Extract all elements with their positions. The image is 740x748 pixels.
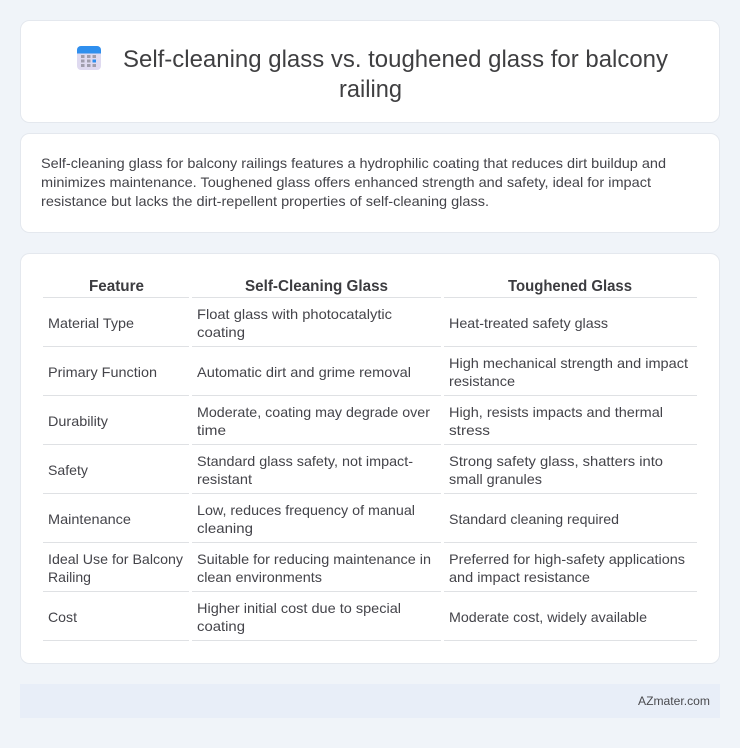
table row: durability: Durability: [48, 413, 108, 429]
table row: cost: [43, 600, 697, 641]
table row: durability: stress: [449, 422, 490, 438]
table header: Toughened Glass: [508, 278, 632, 295]
table row: maintenance: Standard cleaning required: [449, 511, 619, 527]
table row: cost: Moderate cost, widely available: [449, 609, 647, 625]
text block: introduction: [41, 155, 666, 209]
table row: maintenance: Maintenance: [48, 511, 131, 527]
panel: comparison table: [20, 254, 720, 664]
table row: primary function: Primary Function: [48, 364, 157, 380]
table row: ideal use: Railing: [48, 569, 91, 585]
table row: primary function: [43, 355, 697, 396]
table row: primary function: High mechanical strength and impact: [449, 355, 688, 371]
table header: [43, 278, 697, 298]
icon: calendar: [77, 46, 101, 70]
table row: ideal use: [43, 551, 697, 592]
table row: primary function: resistance: [449, 373, 515, 389]
table row: cost: Cost: [48, 609, 77, 625]
table row: material type: Float glass with photocatalytic: [197, 306, 392, 322]
text block: introduction: Self-cleaning glass for balcony railings features a hydrophilic coating that reduces dirt buildup and: [41, 155, 666, 171]
table row: maintenance: cleaning: [197, 520, 253, 536]
table row: safety: Strong safety glass, shatters into: [449, 453, 663, 469]
footer: AZmater.com: [638, 694, 710, 708]
table row: ideal use: clean environments: [197, 569, 322, 585]
footer: [20, 684, 720, 718]
panel: title card: [20, 20, 720, 122]
table row: safety: [43, 453, 697, 494]
table row: cost: coating: [197, 618, 245, 634]
table row: safety: small granules: [449, 471, 542, 487]
table row: safety: resistant: [197, 471, 252, 487]
table row: ideal use: Suitable for reducing maintenance in: [197, 551, 431, 567]
table row: durability: High, resists impacts and thermal: [449, 404, 663, 420]
table row: ideal use: Ideal Use for Balcony: [48, 551, 183, 567]
title: Self-cleaning glass vs. toughened glass for balcony: [123, 46, 668, 73]
table row: maintenance: Low, reduces frequency of manual: [197, 502, 415, 518]
table row: durability: time: [197, 422, 226, 438]
table row: material type: Heat-treated safety glass: [449, 315, 608, 331]
text block: introduction: resistance but lacks the dirt-repellent properties of self-cleaning glass.: [41, 193, 489, 209]
title: railing: [339, 76, 402, 103]
title: [123, 46, 668, 103]
table row: material type: Material Type: [48, 315, 134, 331]
table row: ideal use: Preferred for high-safety applications: [449, 551, 685, 567]
table row: cost: Higher initial cost due to special: [197, 600, 401, 616]
table row: durability: [43, 404, 697, 445]
table row: material type: coating: [197, 324, 245, 340]
table row: primary function: Automatic dirt and grime removal: [197, 364, 411, 380]
table row: ideal use: and impact resistance: [449, 569, 590, 585]
text block: introduction: minimizes maintenance. Toughened glass offers enhanced strength and safety, ideal for impact: [41, 174, 651, 190]
table row: safety: Standard glass safety, not impact-: [197, 453, 413, 469]
table row: durability: Moderate, coating may degrade over: [197, 404, 430, 420]
table row: material type: [43, 306, 697, 347]
panel: introduction: [20, 134, 720, 232]
table row: maintenance: [43, 502, 697, 543]
table header: Feature: [89, 278, 144, 295]
table header: Self-Cleaning Glass: [245, 278, 388, 295]
table row: safety: Safety: [48, 462, 88, 478]
